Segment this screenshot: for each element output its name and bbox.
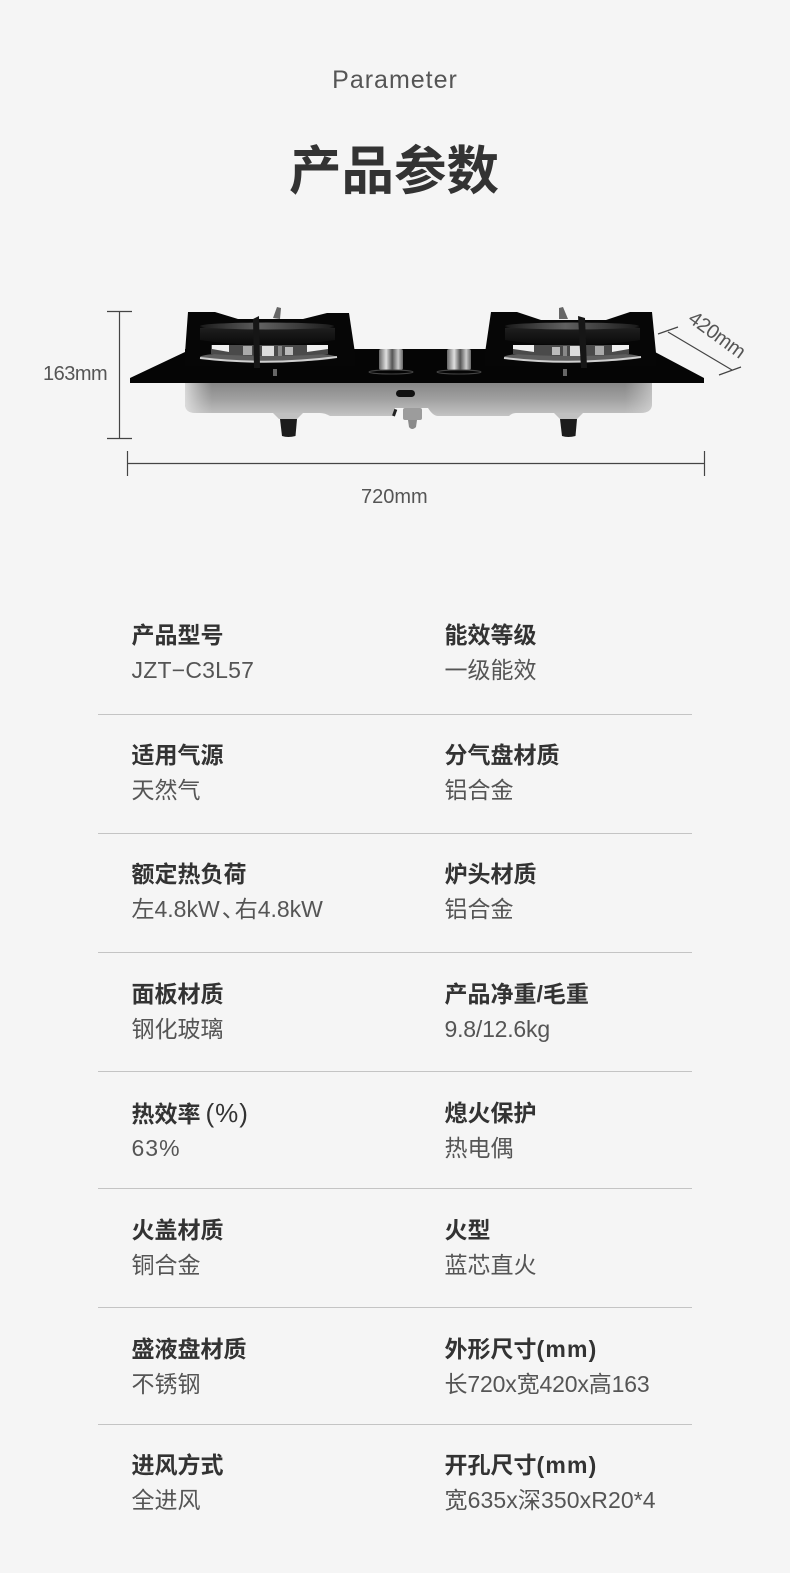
spec: 熄火保护: 热电偶 — [444, 1135, 514, 1161]
label: 420mm: 420mm — [684, 307, 749, 363]
stove body — [185, 382, 652, 416]
spec: 产品净重/毛重 — [444, 981, 589, 1042]
spec: 热效率: 热效率(%) — [132, 1098, 249, 1128]
spec: 盛液盘材质: 盛液盘材质 — [132, 1336, 246, 1362]
spec: 分气盘材质 — [444, 742, 560, 803]
spec: 额定热负荷: 额定热负荷 — [132, 861, 246, 887]
spec: 适用气源: 适用气源 — [132, 742, 224, 768]
spec: 能效等级: 能效等级 — [444, 622, 536, 648]
spec: 产品型号: JZT−C3L57 — [132, 657, 254, 683]
spec: 进风方式: 全进风 — [132, 1487, 200, 1513]
diagram: gas stove with dimensions — [43, 307, 749, 508]
title: 产品参数 — [289, 142, 499, 201]
label: 720mm: 720mm — [361, 486, 428, 508]
spec: 熄火保护 — [444, 1100, 536, 1161]
right grate — [485, 307, 656, 376]
spec: 盛液盘材质 — [132, 1336, 246, 1397]
spec: 炉头材质: 炉头材质 — [444, 861, 536, 887]
label: 163mm: 163mm — [43, 363, 107, 385]
spec: 外形尺寸 — [444, 1336, 650, 1397]
knobs — [369, 349, 481, 374]
spec: 能效等级: 一级能效 — [444, 657, 536, 683]
spec: 外形尺寸: 外形尺寸(mm) — [444, 1336, 598, 1362]
spec: 产品型号 — [132, 622, 254, 683]
subtitle: Parameter: Parameter — [332, 66, 458, 94]
spec: 能效等级 — [444, 622, 536, 683]
spec: 熄火保护: 熄火保护 — [444, 1100, 536, 1126]
feet — [273, 413, 583, 437]
spec: 热效率: 63% — [132, 1135, 181, 1161]
switch — [396, 390, 415, 397]
width dimension line — [128, 451, 704, 476]
spec: 开孔尺寸 — [444, 1452, 656, 1513]
spec: 产品型号: 产品型号 — [132, 622, 224, 648]
left grate — [185, 307, 355, 376]
gas inlet fitting — [392, 408, 422, 429]
spec: 火型: 火型 — [444, 1217, 490, 1243]
height dimension line — [107, 311, 132, 439]
spec: 适用气源: 天然气 — [132, 777, 200, 803]
spec: 面板材质 — [132, 981, 224, 1042]
spec: 炉头材质: 铝合金 — [444, 896, 514, 922]
depth dimension line — [658, 327, 741, 375]
spec: 进风方式 — [132, 1452, 224, 1513]
spec: 额定热负荷 — [132, 861, 323, 922]
spec: 盛液盘材质: 不锈钢 — [132, 1371, 200, 1397]
spec: 产品净重/毛重: 产品净重/毛重 — [444, 981, 589, 1007]
spec: 适用气源 — [132, 742, 224, 803]
spec: 产品净重/毛重: 9.8/12.6kg — [444, 1016, 550, 1042]
spec: 炉头材质 — [444, 861, 536, 922]
spec: 分气盘材质: 分气盘材质 — [444, 742, 560, 768]
spec: 热效率 — [132, 1098, 249, 1161]
spec: 火盖材质 — [132, 1217, 224, 1278]
spec: 火盖材质: 火盖材质 — [132, 1217, 224, 1243]
spec: 开孔尺寸: 宽635x深350xR20*4 — [444, 1487, 656, 1513]
spec: 进风方式: 进风方式 — [132, 1452, 224, 1478]
spec: 额定热负荷: 左4.8kW、右4.8kW — [132, 896, 323, 922]
spec: 开孔尺寸: 开孔尺寸(mm) — [444, 1452, 598, 1478]
spec: 火盖材质: 铜合金 — [132, 1252, 200, 1278]
spec: 分气盘材质: 铝合金 — [444, 777, 514, 803]
spec: 面板材质: 面板材质 — [132, 981, 224, 1007]
spec: 面板材质: 钢化玻璃 — [132, 1016, 224, 1042]
spec: 火型 — [444, 1217, 536, 1278]
glass panel — [130, 349, 704, 383]
spec: 外形尺寸: 长720x宽420x高163 — [444, 1371, 650, 1397]
spec: 火型: 蓝芯直火 — [444, 1252, 536, 1278]
